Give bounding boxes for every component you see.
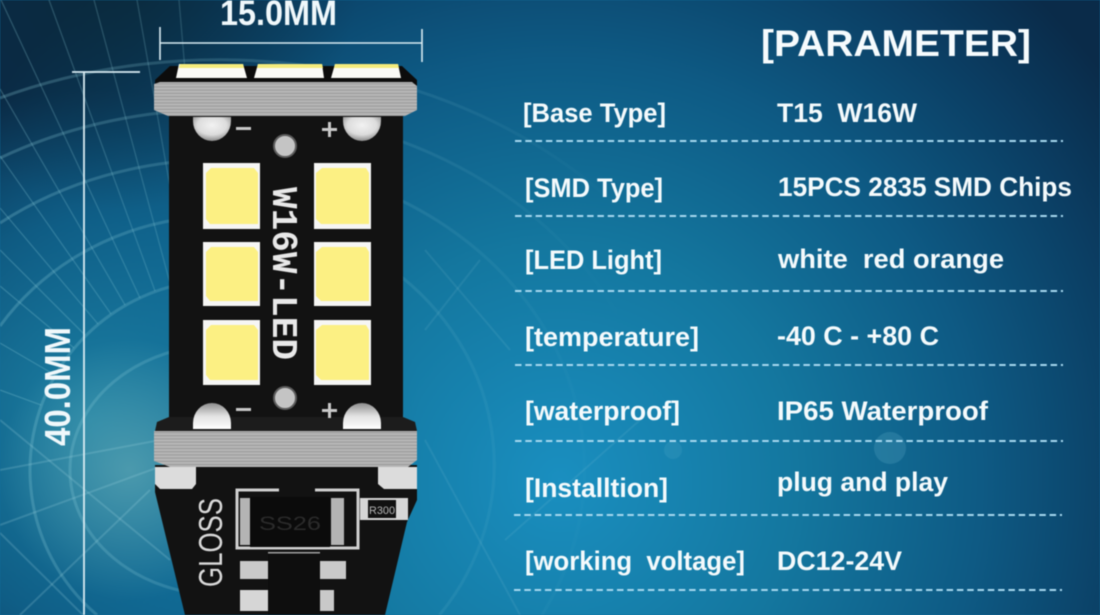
top cap with end LEDs — [155, 64, 417, 86]
SS26 diode — [237, 490, 358, 548]
lens flare — [664, 432, 906, 464]
base solder pads — [155, 467, 417, 489]
R300 resistor: R300 — [369, 505, 395, 517]
title: [PARAMETER] — [761, 23, 1031, 64]
base PCB — [155, 465, 417, 615]
PCB marking: W16W-LED — [262, 187, 303, 360]
row: temperature — [525, 321, 939, 352]
row: base type: [Base Type] — [523, 98, 666, 128]
row: working voltage — [525, 546, 902, 576]
lower shoulder — [155, 417, 417, 431]
parameter table — [514, 98, 1072, 590]
GLOSS brand: GLOSS — [192, 498, 229, 587]
row: installation — [525, 467, 948, 503]
row: installation: [Installtion] — [525, 473, 668, 503]
R300 resistor — [360, 498, 408, 520]
row: installation: plug and play — [777, 467, 948, 497]
row: waterproof: IP65 Waterproof — [777, 396, 989, 426]
row: SMD type — [525, 172, 1072, 203]
PCB main — [169, 112, 403, 437]
polarity marks — [236, 122, 337, 418]
row: SMD type: 15PCS 2835 SMD Chips — [778, 172, 1072, 202]
lower metal band — [154, 431, 417, 467]
height label: 40.0MM — [37, 327, 78, 446]
row: base type: T15 W16W — [777, 98, 918, 128]
row: working voltage: [working voltage] — [525, 546, 745, 576]
lower IC — [240, 552, 346, 615]
SS26 diode: SS26 — [259, 514, 321, 535]
row: LED light: white red orange — [777, 244, 1004, 274]
row: waterproof: [waterproof] — [525, 396, 680, 426]
solder pads upper — [193, 117, 381, 429]
row: temperature: [temperature] — [525, 322, 699, 352]
mount holes — [274, 135, 296, 409]
row: SMD type: [SMD Type] — [525, 173, 663, 203]
row: waterproof — [525, 396, 989, 426]
upper metal band — [154, 82, 417, 116]
row: base type — [523, 98, 918, 128]
SMD LED chips — [203, 163, 371, 385]
row: LED light — [525, 244, 1004, 275]
row: LED light: [LED Light] — [525, 245, 662, 275]
LED bulb — [154, 64, 417, 615]
row: working voltage: DC12-24V — [777, 546, 902, 576]
row: temperature: -40 C - +80 C — [777, 321, 939, 351]
